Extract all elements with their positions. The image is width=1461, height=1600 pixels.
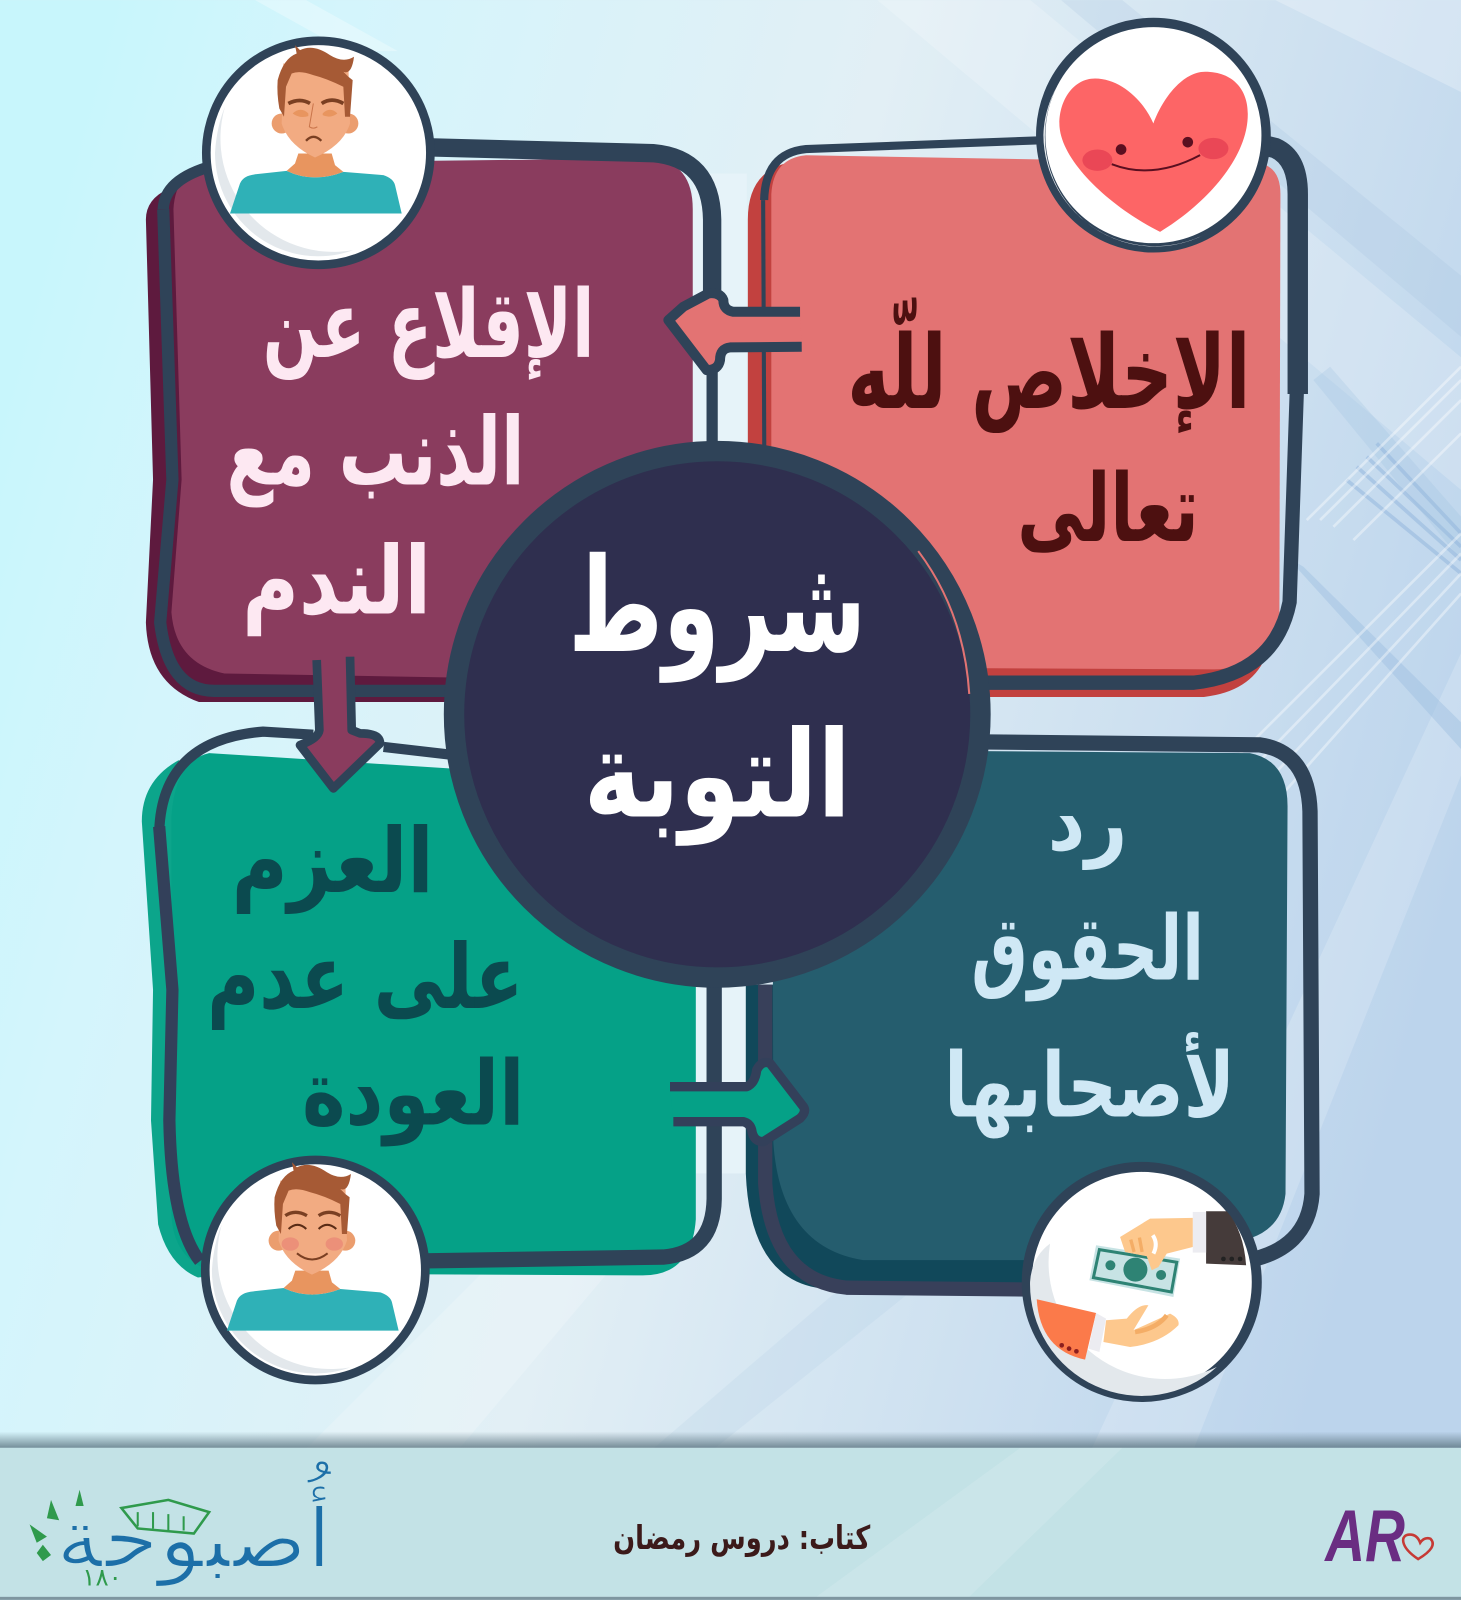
- arrow: maroon to green: [300, 657, 380, 788]
- panel: dark teal, returning rights: [746, 742, 1312, 1296]
- light gaps between panels: [693, 174, 747, 454]
- panel: green, resolve: [142, 732, 714, 1277]
- line 3 text: لأصحابها: [944, 1031, 1235, 1138]
- arrow: pink to maroon: [668, 293, 802, 370]
- plaid lines lower right: [1033, 367, 1461, 1010]
- line 2 text: الحقوق: [971, 898, 1204, 1002]
- icon: money handover: [1027, 1167, 1257, 1397]
- line 1 text: رد: [1048, 775, 1127, 870]
- logo: Osbouha 180: أُصبوحة: [56, 1460, 333, 1587]
- line 3 text: الندم: [242, 527, 431, 636]
- icon: sad man: [206, 41, 430, 265]
- logo number: ١٨٠: [82, 1563, 122, 1592]
- panel: pink, sincerity: [748, 140, 1298, 697]
- logo: AR heart: AR: [1324, 1495, 1405, 1577]
- footer caption: كتاب: دروس رمضان: [613, 1519, 870, 1558]
- logo: Osbouha 180: [30, 1460, 333, 1592]
- footer bar: [0, 1432, 1461, 1600]
- line 2 text: الذنب مع: [226, 399, 524, 508]
- center heading line 1: شروط: [568, 530, 866, 684]
- panel: maroon, quitting the sin: [146, 147, 712, 702]
- line 3 text: العودة: [302, 1042, 524, 1146]
- icon: heart face: [1041, 22, 1266, 248]
- icon: smiling man: [205, 1160, 425, 1380]
- panel heading text: الإخلاص للّه: [847, 297, 1250, 433]
- center heading line 2: التوبة: [584, 705, 851, 845]
- panel body text: تعالى: [1017, 455, 1199, 564]
- arrow: green to teal: [670, 1063, 804, 1142]
- line 2 text: على عدم: [207, 926, 523, 1030]
- line 1 text: العزم: [232, 810, 434, 914]
- line 1 text: الإقلاع عن: [263, 271, 594, 380]
- center circle: [454, 451, 980, 978]
